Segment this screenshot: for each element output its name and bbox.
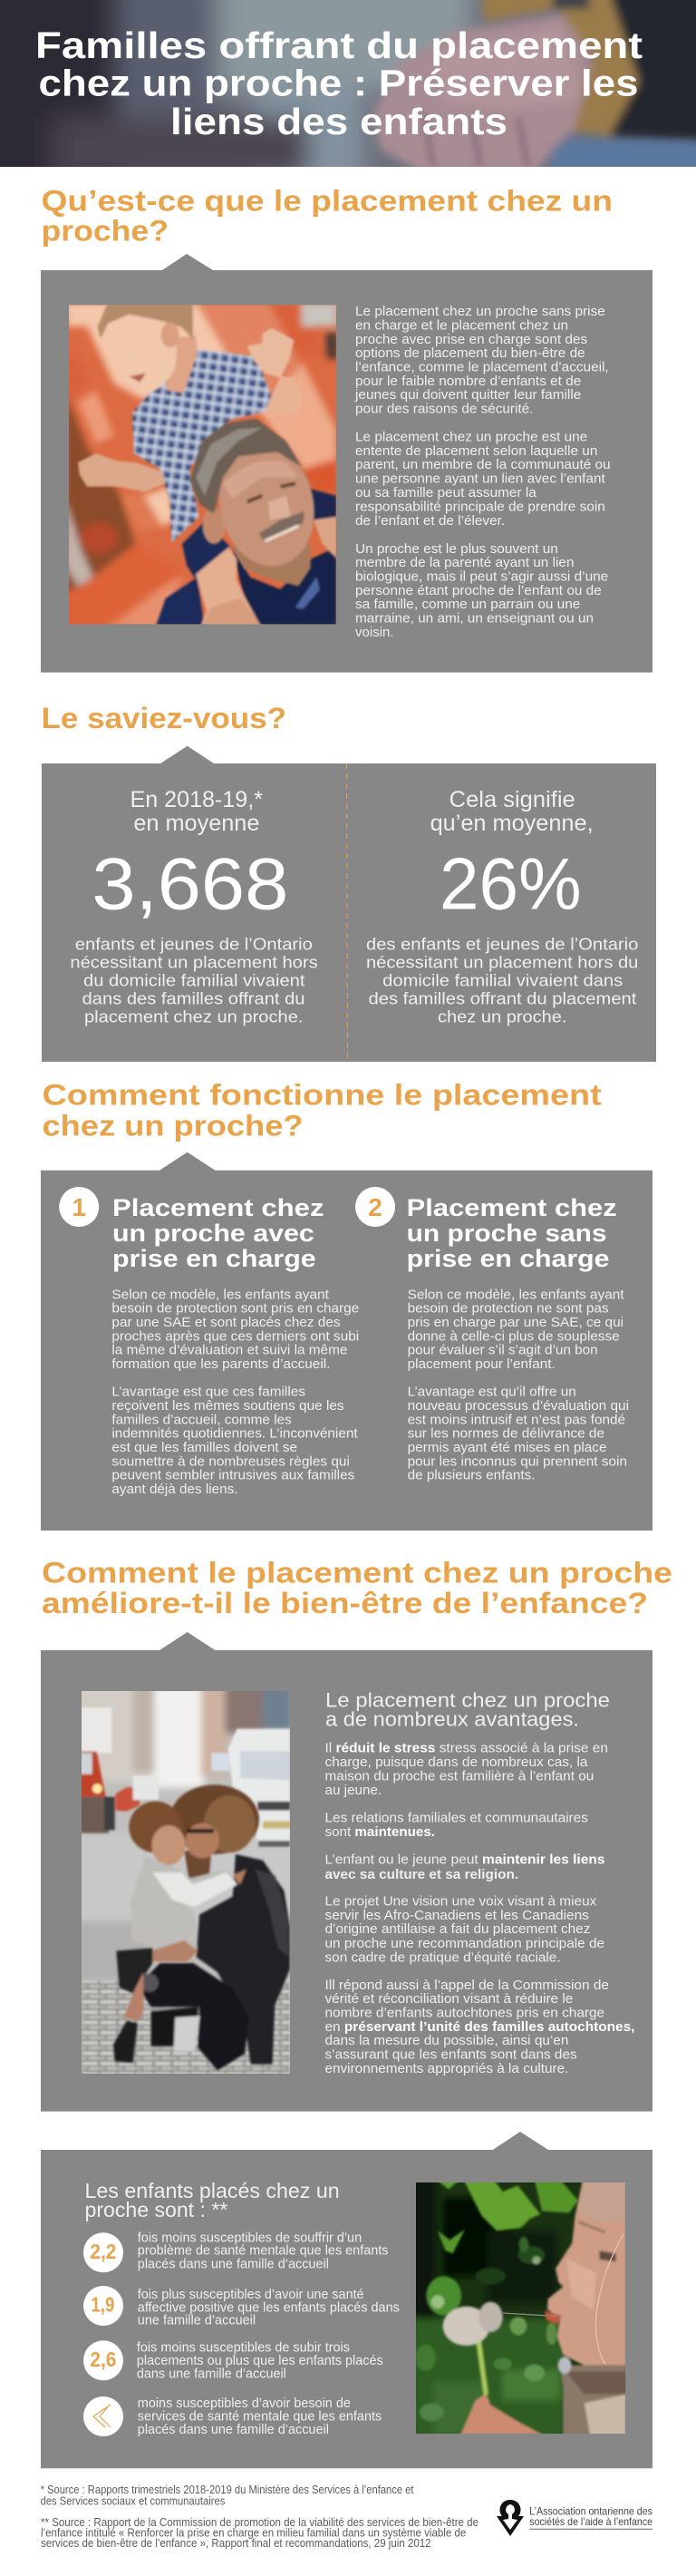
column text 1: indemnités quotidiennes. L’inconvénient bbox=[111, 1426, 358, 1442]
column text 1: est que les familles doivent se bbox=[111, 1440, 297, 1455]
column text 1: la même d’évaluation et suivi la même bbox=[111, 1343, 347, 1358]
footnote 1 bbox=[41, 2484, 414, 2508]
column text 1: ayant déjà des liens. bbox=[111, 1482, 238, 1497]
statistic: 26 percent: chez un proche. bbox=[438, 1008, 567, 1026]
text: definition paragraphs: sa famille, comme un parrain ou une bbox=[355, 598, 580, 612]
subheading: benefits bbox=[325, 1688, 610, 1731]
column text 2: de plusieurs enfants. bbox=[408, 1468, 535, 1483]
stat: 2,2: fois moins susceptibles de souffrir d’un bbox=[138, 2230, 362, 2245]
statistic: 26 percent: qu’en moyenne, bbox=[430, 811, 594, 836]
subheading: children placed: Les enfants placés chez un bbox=[85, 2179, 340, 2202]
photo: girl blowing a dandelion bbox=[409, 2176, 626, 2439]
stat: less than symbol: services de santé mentale que les enfants bbox=[138, 2408, 382, 2424]
heading: Qu'est-ce que le placement bbox=[42, 185, 613, 248]
text: benefits: avec sa culture et sa religion. bbox=[324, 1867, 518, 1882]
column text 2 bbox=[408, 1287, 629, 1483]
text: benefits: environnements appropriés à la culture. bbox=[324, 2061, 568, 2076]
number badge 2 bbox=[355, 1187, 395, 1227]
statistic: 3,668 children: placement chez un proche. bbox=[84, 1008, 303, 1026]
text: definition paragraphs: options de placement du bien-être de bbox=[355, 346, 585, 361]
footnotes bbox=[41, 2484, 478, 2550]
heading: Comment fonctionne bbox=[42, 1079, 602, 1142]
column text 1: formation que les parents d’accueil. bbox=[111, 1356, 330, 1372]
text: benefits: Les relations familiales et communautaires bbox=[324, 1810, 588, 1825]
title: liens des enfants bbox=[170, 101, 508, 142]
text: definition paragraphs: marraine, un ami, un enseignant ou un bbox=[355, 611, 594, 626]
column heading 2: un proche sans bbox=[407, 1220, 607, 1247]
column text 2: sur les normes de délivrance de bbox=[408, 1426, 604, 1442]
panel background with pointer bbox=[41, 1632, 652, 2112]
text: benefits: son cadre de pratique d’équité raciale. bbox=[324, 1949, 561, 1965]
stat: 2,2: problème de santé mentale que les enfants bbox=[138, 2243, 389, 2259]
text: definition paragraphs: une personne ayant un lien avec l’enfant bbox=[355, 472, 605, 487]
text: definition paragraphs: Le placement chez un proche est une bbox=[355, 431, 587, 445]
statistic: 26 percent: des enfants et jeunes de l’Ontario bbox=[366, 935, 638, 953]
panel: definition bbox=[41, 254, 652, 673]
stat: 2,6: dans une famille d’accueil bbox=[137, 2366, 286, 2381]
icon: logo mark bbox=[497, 2500, 524, 2536]
column text 2: pour les inconnus qui prennent soin bbox=[408, 1453, 627, 1469]
header photo: child's hand bbox=[0, 0, 696, 167]
statistic: 3,668 children: En 2018-19,* bbox=[130, 787, 263, 812]
text: definition paragraphs: voisin. bbox=[355, 626, 394, 640]
column text 1: peuvent sembler intrusives aux familles bbox=[111, 1468, 355, 1483]
text: definition paragraphs: responsabilité principale de prendre soin bbox=[355, 500, 605, 514]
logo: Association ontarienne des sociétés de l'aide à l'enfance bbox=[497, 2500, 652, 2536]
statistic: 26 percent: Cela signifie bbox=[450, 787, 575, 812]
column text 2: L’avantage est qu’il offre un bbox=[408, 1385, 576, 1400]
column text 2: est moins intrusif et n’est pas fondé bbox=[408, 1412, 625, 1427]
statistic: 3,668 children: nécessitant un placement hors bbox=[70, 953, 318, 971]
column text 1: proches après que ces derniers ont subi bbox=[111, 1328, 359, 1344]
column text 2: permis ayant été mises en place bbox=[408, 1440, 607, 1455]
stat: 1,9 bbox=[83, 2286, 400, 2328]
column heading 2: Placement chez bbox=[407, 1194, 617, 1221]
text: benefits: nombre d’enfants autochtones pris en charge bbox=[324, 2006, 604, 2020]
stat: 2,2: 2,2 bbox=[90, 2240, 116, 2263]
text: definition paragraphs: biologique, mais il peut s’agir aussi d’une bbox=[355, 569, 608, 584]
column text 2: pris en charge par une SAE, ce qui bbox=[408, 1315, 624, 1330]
title bbox=[35, 24, 643, 142]
text: definition paragraphs: ou sa famille peut assumer la bbox=[355, 486, 537, 501]
column text 1: besoin de protection sont pris en charge bbox=[111, 1301, 359, 1317]
column text 2: pour évaluer s’il s’agit d’un bon bbox=[408, 1343, 598, 1358]
text: benefits: au jeune. bbox=[324, 1783, 382, 1798]
text: benefits: un proche une recommandation principale de bbox=[324, 1936, 604, 1951]
statistic: 26 percent: domicile familial vivaient dans bbox=[382, 972, 623, 990]
footnote 2 bbox=[41, 2516, 478, 2550]
column text 2: donne à celle-ci plus de souplesse bbox=[408, 1328, 620, 1344]
heading: Qu'est-ce que le placement: proche? bbox=[42, 215, 169, 248]
text: benefits: servir les Afro-Canadiens et les Canadiens bbox=[324, 1908, 589, 1923]
stat: 2,6: placements ou plus que les enfants placés bbox=[137, 2353, 383, 2368]
column text 2: placement pour l’enfant. bbox=[408, 1356, 556, 1372]
column heading 1: Placement chez bbox=[112, 1194, 324, 1221]
statistic: 3,668 children bbox=[70, 787, 318, 1026]
column heading 1 bbox=[112, 1194, 324, 1272]
column: with care bbox=[59, 1187, 359, 1497]
text: benefits: sont maintenues. bbox=[324, 1824, 435, 1840]
text: definition paragraphs: jeunes qui doivent quitter leur famille bbox=[354, 388, 581, 403]
photo: mother and child on a city street bbox=[75, 1685, 296, 2074]
column text 2: Selon ce modèle, les enfants ayant bbox=[408, 1287, 624, 1302]
panel background with pointer bbox=[41, 1152, 652, 1531]
stat: 1,9: affective positive que les enfants placés dans bbox=[138, 2299, 400, 2315]
column heading 2 bbox=[407, 1194, 617, 1272]
panel: outcomes for children bbox=[41, 2132, 652, 2468]
text: definition paragraphs: entente de placement selon laquelle un bbox=[355, 444, 597, 459]
text: benefits bbox=[324, 1688, 634, 2076]
text: benefits: L’enfant ou le jeune peut maintenir les liens bbox=[324, 1852, 605, 1868]
footnote 2: l’enfance intitulé « Renforcer la prise en charge en milieu familial dans un système viable de bbox=[41, 2527, 466, 2540]
panel background with pointer bbox=[41, 2132, 652, 2468]
text: benefits: charge, puisque dans de nombreux cas, la bbox=[324, 1755, 588, 1770]
statistic: 3,668 children: en moyenne bbox=[133, 811, 259, 836]
photo: grandfather carrying child on shoulders bbox=[66, 302, 338, 628]
text: definition paragraphs bbox=[354, 305, 611, 640]
stat: 1,9: fois plus susceptibles d’avoir une santé bbox=[138, 2287, 364, 2302]
header banner bbox=[0, 0, 696, 167]
text: definition paragraphs: membre de la parenté ayant un lien bbox=[355, 556, 575, 570]
stat: less than symbol bbox=[83, 2396, 382, 2437]
text: definition paragraphs: personne étant proche de l’enfant ou de bbox=[355, 584, 602, 598]
text: benefits: s’assurant que les enfants sont dans des bbox=[324, 2047, 577, 2063]
statistic: 3,668 children: du domicile familial vivaient bbox=[83, 972, 304, 990]
panel: benefits bbox=[41, 1632, 652, 2112]
heading: Comment fonctionne: chez un proche? bbox=[42, 1109, 303, 1142]
footnote 2: ** Source : Rapport de la Commission de promotion de la viabilité des services de bien-être de bbox=[41, 2516, 478, 2529]
text: definition paragraphs: pour le faible nombre d’enfants et de bbox=[355, 374, 581, 389]
statistic: 3,668 children: enfants et jeunes de l’Ontario bbox=[75, 935, 313, 953]
stat: 2,6: 2,6 bbox=[90, 2348, 116, 2371]
heading: Comment fonctionne: Comment fonctionne le placement bbox=[42, 1079, 602, 1112]
text: benefits: vérité et réconciliation visant à réduire le bbox=[324, 1991, 573, 2007]
text: definition paragraphs: parent, un membre de la communauté ou bbox=[355, 458, 611, 472]
stat: 1,9: 1,9 bbox=[91, 2293, 114, 2317]
statistic: 26 percent: des familles offrant du placement bbox=[368, 990, 636, 1008]
heading: Comment le placement améliore: améliore-t-il le bien-être de l’enfance? bbox=[42, 1587, 648, 1619]
text: benefits: en préservant l’unité des familles autochtones, bbox=[324, 2019, 634, 2035]
number badge 1: 1 bbox=[72, 1193, 86, 1221]
column text 2: besoin de protection ne sont pas bbox=[408, 1301, 609, 1317]
subheading: benefits: a de nombreux avantages. bbox=[325, 1708, 579, 1731]
title: Familles offrant du placement bbox=[35, 24, 643, 66]
text: definition paragraphs: proche avec prise en charge sont des bbox=[355, 333, 587, 347]
panel: two placement models bbox=[41, 1152, 652, 1531]
footnote 1: des Services sociaux et communautaires bbox=[41, 2495, 225, 2508]
statistic: 26 percent: 26% bbox=[440, 844, 582, 926]
statistic: 26 percent: nécessitant un placement hors du bbox=[366, 953, 638, 971]
heading: Le saviez-vous: Le saviez-vous? bbox=[42, 702, 286, 734]
column heading 2: prise en charge bbox=[407, 1245, 609, 1272]
logo: Association ontarienne des sociétés de l'aide à l'enfance: L’Association ontarienne des bbox=[529, 2504, 652, 2517]
heading: Qu'est-ce que le placement: Qu’est-ce que le placement chez un bbox=[42, 185, 613, 218]
text: benefits: d’origine antillaise a fait du placement chez bbox=[324, 1921, 590, 1937]
subheading: benefits: Le placement chez un proche bbox=[325, 1688, 610, 1711]
text: definition paragraphs: de l’enfant et de l’élever. bbox=[355, 514, 505, 529]
text: benefits: maison du proche est familière à l’enfant ou bbox=[324, 1768, 594, 1784]
stat: less than symbol: placés dans une famille d’accueil bbox=[138, 2422, 329, 2437]
stat: 2,6: fois moins susceptibles de subir trois bbox=[137, 2339, 350, 2355]
text: definition paragraphs: Un proche est le plus souvent un bbox=[355, 542, 558, 557]
footnote 2: services de bien-être de l’enfance », Rapport final et recommandations, 29 juin 2012 bbox=[41, 2537, 431, 2550]
text: definition paragraphs: Le placement chez un proche sans prise bbox=[355, 305, 605, 319]
column: without care bbox=[355, 1187, 629, 1483]
stat: 2,2 bbox=[83, 2230, 389, 2272]
text: benefits: Ill répond aussi à l’appel de la Commission de bbox=[324, 1978, 609, 1993]
text: definition paragraphs: en charge et le placement chez un bbox=[355, 319, 568, 334]
column text 1: par une SAE et sont placés chez des bbox=[111, 1315, 341, 1330]
column text 1: L’avantage est que ces familles bbox=[111, 1385, 305, 1400]
statistic: 26 percent bbox=[366, 787, 638, 1026]
stat: 2,6 bbox=[83, 2339, 383, 2381]
statistic: 3,668 children: dans des familles offrant du bbox=[82, 990, 304, 1008]
panel background with pointer bbox=[41, 254, 652, 673]
text: benefits: dans la mesure du possible, ainsi qu’en bbox=[324, 2033, 568, 2048]
panel background with pointer bbox=[42, 746, 656, 1062]
column text 1: Selon ce modèle, les enfants ayant bbox=[111, 1287, 330, 1302]
heading: Comment le placement améliore bbox=[42, 1557, 672, 1619]
column heading 1: prise en charge bbox=[112, 1245, 316, 1272]
column text 2: nouveau processus d’évaluation qui bbox=[408, 1398, 629, 1414]
stat: 2,2: placés dans une famille d’accueil bbox=[138, 2256, 329, 2271]
number badge 2: 2 bbox=[368, 1193, 382, 1221]
heading: Comment le placement améliore: Comment le placement chez un proche bbox=[42, 1557, 672, 1589]
footnote 1: * Source : Rapports trimestriels 2018-2019 du Ministère des Services à l’enfance et bbox=[41, 2484, 414, 2496]
text: definition paragraphs: pour des raisons de sécurité. bbox=[355, 403, 533, 417]
column text 1 bbox=[111, 1287, 359, 1497]
text: benefits: Le projet Une vision une voix visant à mieux bbox=[324, 1894, 597, 1910]
title: chez un proche : Préserver les bbox=[38, 62, 638, 103]
text: benefits: Il réduit le stress stress associé à la prise en bbox=[324, 1741, 608, 1756]
column heading 1: un proche avec bbox=[112, 1220, 314, 1247]
panel: statistics bbox=[42, 746, 656, 1062]
statistic: 3,668 children: 3,668 bbox=[92, 844, 288, 926]
number badge 1 bbox=[59, 1187, 99, 1227]
column text 1: reçoivent les mêmes soutiens que les bbox=[111, 1398, 344, 1414]
subheading: children placed bbox=[85, 2179, 340, 2221]
column text 1: familles d’accueil, comme les bbox=[111, 1412, 292, 1427]
column text 1: soumettre à de nombreuses règles qui bbox=[111, 1453, 350, 1469]
stat: less than symbol: moins susceptibles d’avoir besoin de bbox=[138, 2396, 351, 2411]
logo: Association ontarienne des sociétés de l'aide à l'enfance: sociétés de l’aide à l’enfance bbox=[529, 2515, 652, 2528]
subheading: children placed: proche sont : ** bbox=[85, 2198, 227, 2221]
text: definition paragraphs: l’enfance, comme le placement d’accueil, bbox=[355, 361, 609, 375]
stat: 1,9: une famille d’accueil bbox=[138, 2313, 256, 2328]
